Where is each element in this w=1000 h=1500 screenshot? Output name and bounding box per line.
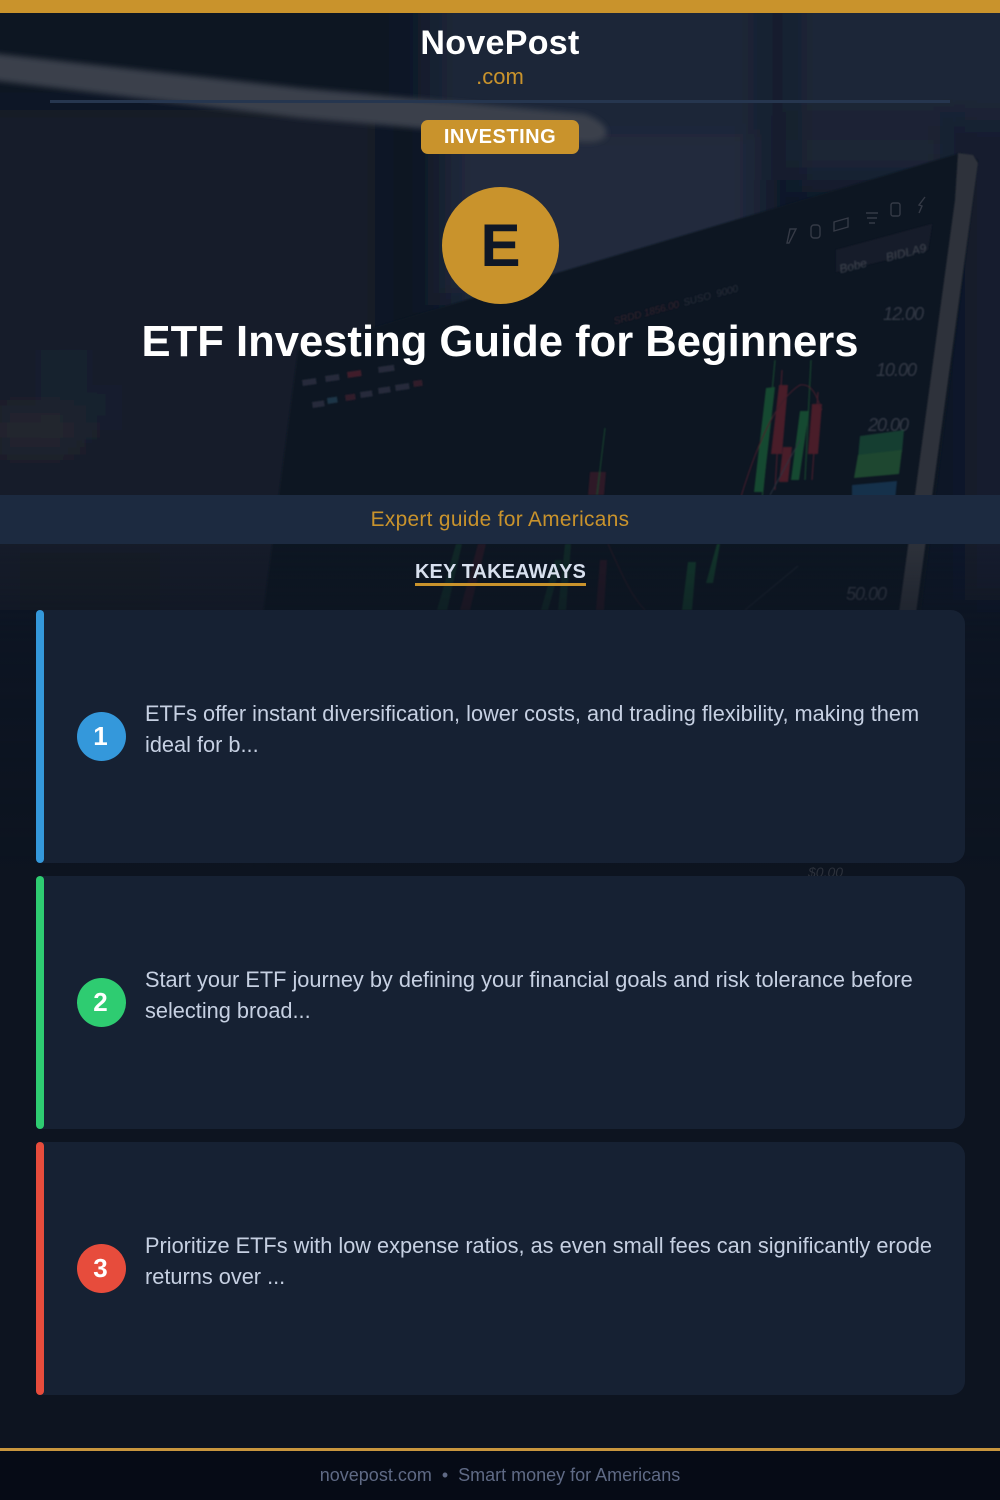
background: blurred trading monitor photo: $0.00 (807, 864, 843, 880)
monitor toolbar icons (787, 197, 925, 243)
takeaway 3 text: Prioritize ETFs with low expense ratios, as even small fees can significantly erode (145, 1233, 932, 1258)
brand suffix: .com (476, 64, 524, 89)
monitor labels: 9000 (715, 283, 740, 300)
takeaway 3 text: returns over ... (145, 1264, 285, 1289)
lower chart segment (242, 544, 798, 876)
order book row chips (302, 365, 423, 408)
category badge (421, 120, 579, 154)
panel: takeaway 3 (36, 1142, 965, 1395)
header divider (50, 100, 950, 103)
takeaway 1 text (145, 701, 919, 757)
footer (0, 1448, 1000, 1500)
title: ETF Investing Guide for Beginners (142, 318, 858, 366)
number badge 2 (77, 978, 126, 1027)
icon: letter medallion (442, 187, 559, 304)
wall tones (0, 0, 1000, 880)
takeaway 2 text: Start your ETF journey by defining your financial goals and risk tolerance before (145, 967, 913, 992)
number badge 1: 1 (93, 721, 108, 751)
top accent bar (0, 0, 1000, 13)
monitor labels: SUSO (682, 291, 713, 309)
takeaway 1 text: ETFs offer instant diversification, lower costs, and trading flexibility, making them (145, 701, 919, 726)
monitor labels: 20.00 (867, 415, 909, 435)
subtitle band (0, 495, 1000, 544)
desk lamp streak (0, 53, 607, 142)
monitor labels (613, 224, 932, 604)
number badge 3 (77, 1244, 126, 1293)
number badge 3: 3 (93, 1253, 108, 1283)
number badge 1 (77, 712, 126, 761)
monitor labels: SRDD 1856.00 (613, 299, 681, 327)
monitor labels: BIDLA9 (884, 241, 928, 265)
brand name: NovePost (420, 24, 580, 62)
takeaway 1 text: ideal for b... (145, 732, 259, 757)
takeaway 3 text (145, 1233, 932, 1289)
candlesticks (588, 360, 822, 500)
number badge 2: 2 (93, 987, 108, 1017)
monitor frame (225, 153, 978, 900)
subtitle band: Expert guide for Americans (371, 508, 629, 531)
monitor labels: 50.00 (846, 584, 887, 604)
category badge: INVESTING (444, 126, 556, 148)
icon: letter medallion: E (480, 212, 521, 279)
footer: novepost.com • Smart money for Americans (320, 1465, 680, 1485)
panel: takeaway 2 (36, 876, 965, 1129)
panel: takeaway 1 (36, 610, 965, 863)
monitor labels: 10.00 (876, 360, 917, 380)
monitor labels: 12.00 (883, 304, 924, 324)
price tags (852, 430, 904, 500)
takeaway 2 text: selecting broad... (145, 998, 311, 1023)
section heading: KEY TAKEAWAYS (415, 561, 586, 583)
lower darkening (0, 540, 1000, 880)
takeaway 2 text (145, 967, 913, 1023)
monitor labels: Bobe (838, 256, 869, 276)
